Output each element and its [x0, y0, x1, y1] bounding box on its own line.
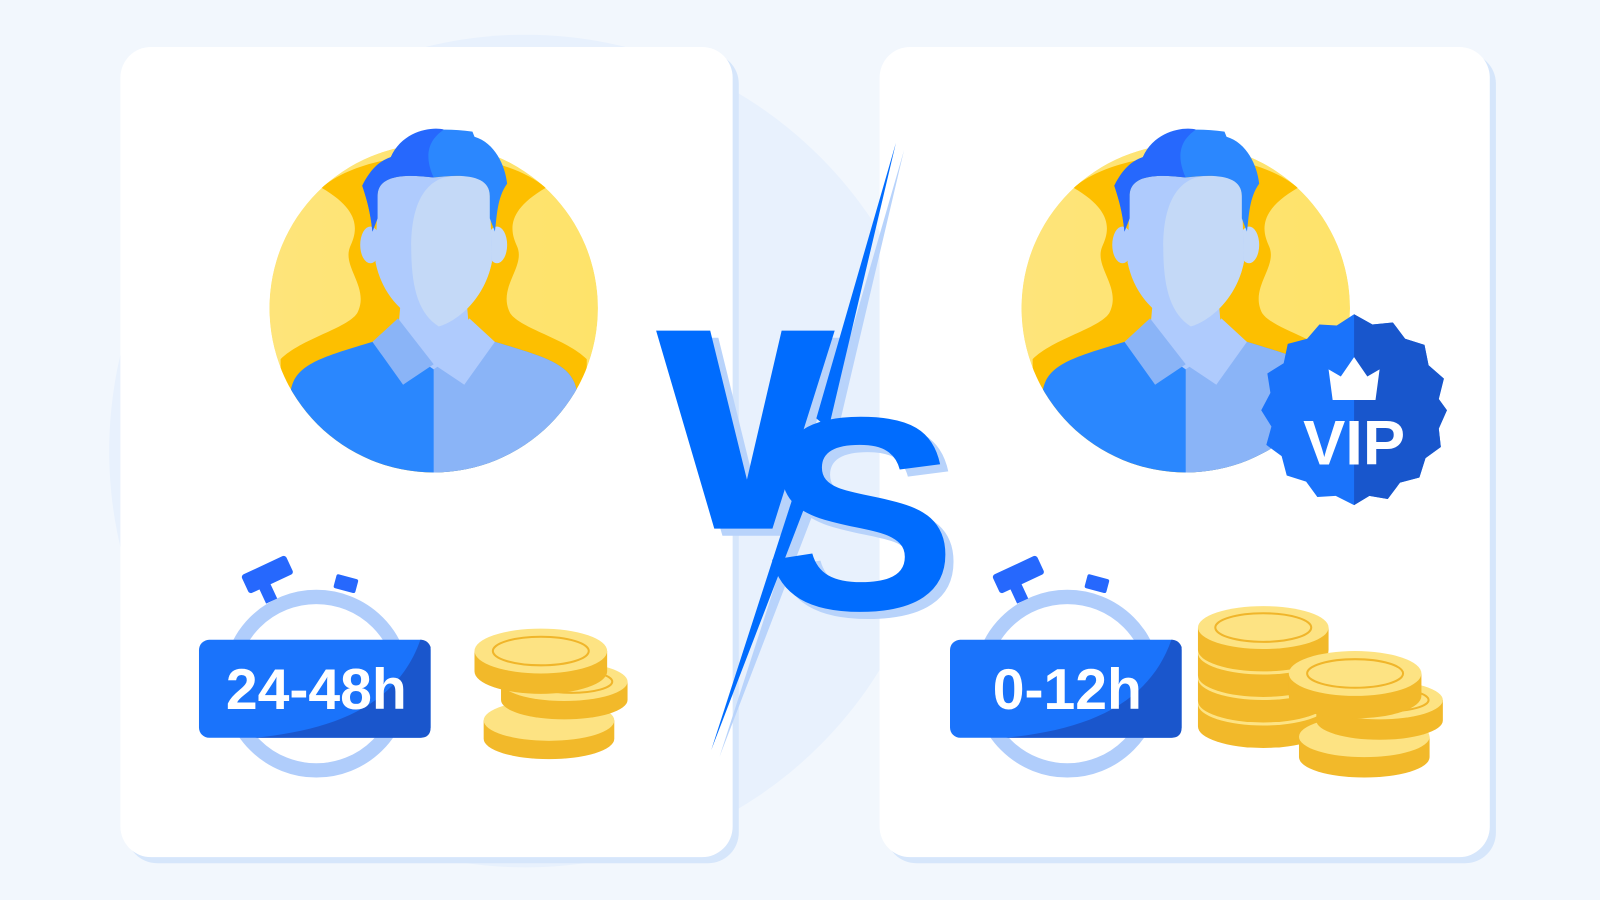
VS emblem: S — [764, 360, 957, 668]
VS emblem — [656, 143, 965, 757]
avatar: left user — [269, 129, 598, 512]
icon: stopwatch 0-12h: 0-12h — [993, 658, 1142, 722]
icon: stopwatch 0-12h — [950, 555, 1182, 770]
icon: stopwatch 24-48h — [199, 555, 431, 770]
icon: VIP badge — [1261, 314, 1447, 505]
panel: right card — [880, 47, 1496, 863]
icon: coins big stacks — [1198, 606, 1443, 778]
icon: stopwatch 24-48h: 24-48h — [226, 658, 407, 722]
icon: coins small stack — [474, 629, 628, 759]
panel: left card — [120, 47, 739, 863]
VS emblem: S — [772, 367, 965, 675]
avatar: VIP user — [1021, 129, 1350, 512]
background circle — [109, 35, 942, 867]
icon: VIP badge: VIP — [1303, 408, 1405, 478]
